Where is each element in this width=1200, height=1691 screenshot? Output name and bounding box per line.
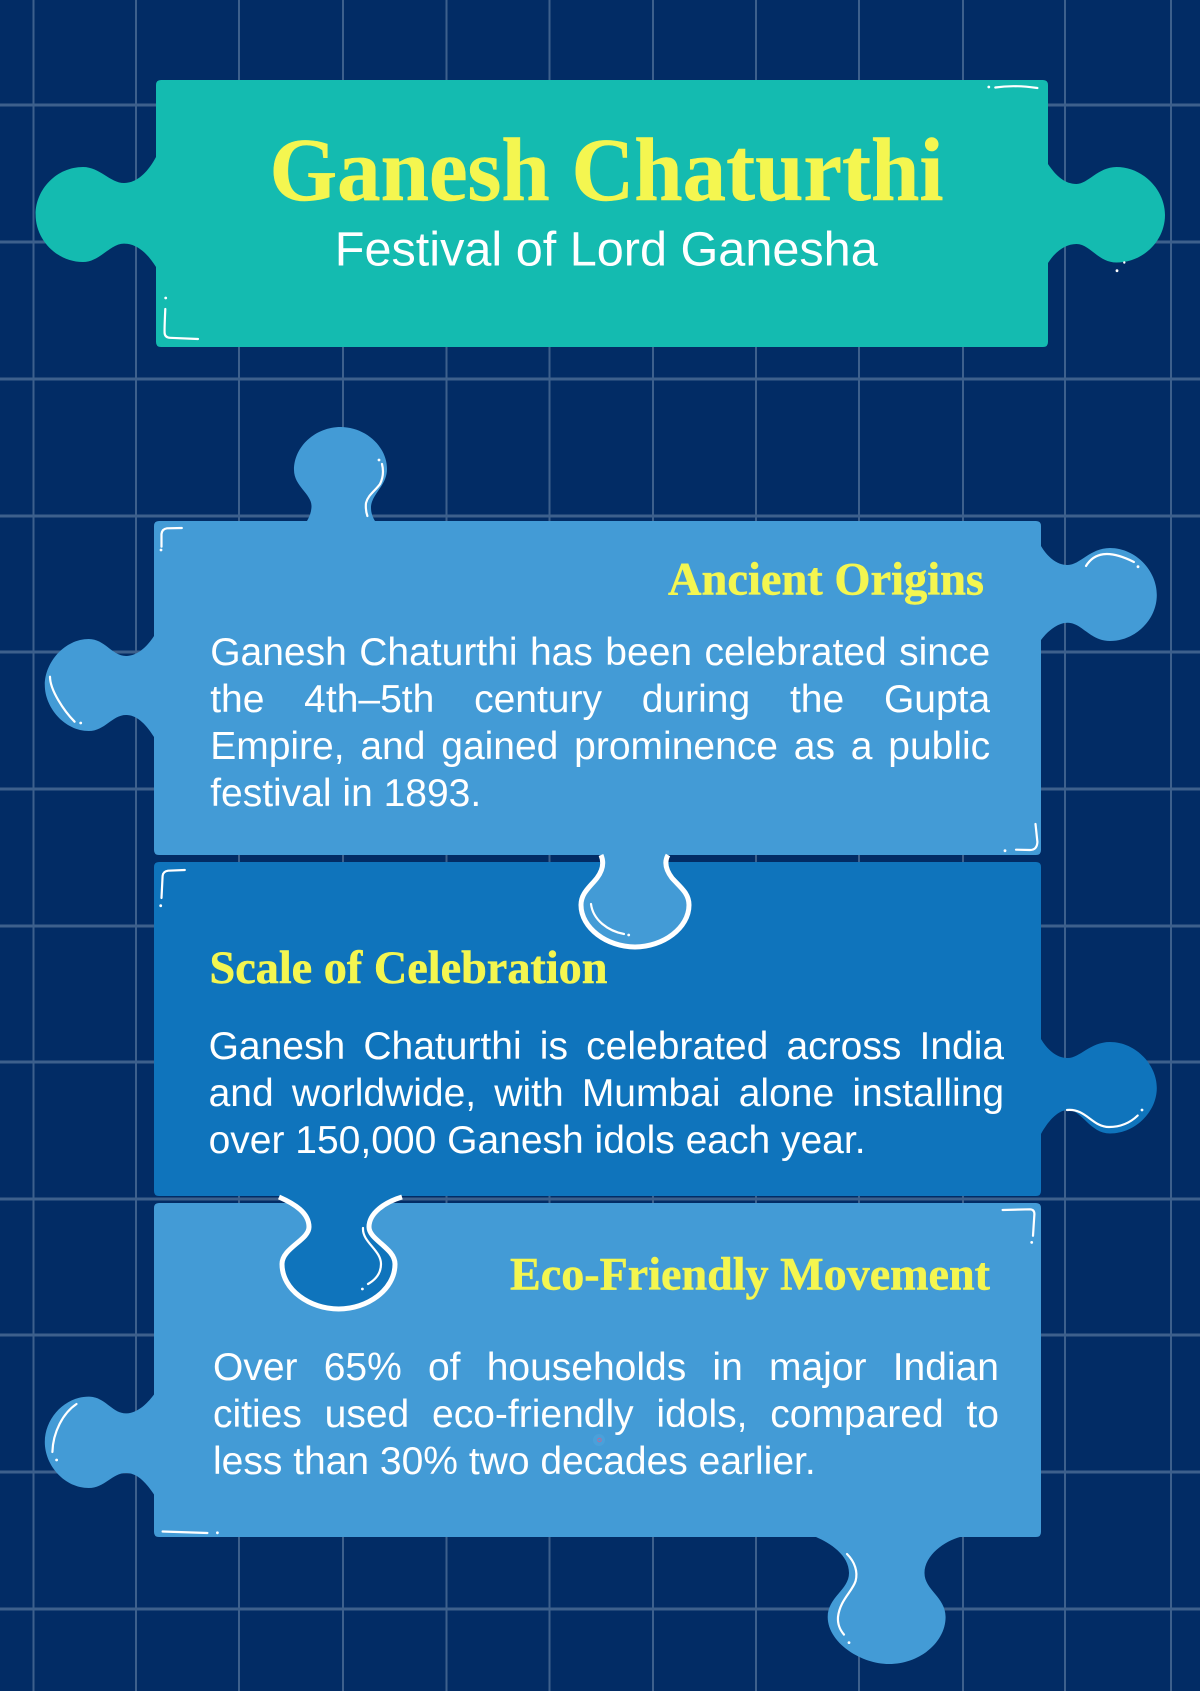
- outline: tab white edge: [581, 855, 689, 947]
- accent: ancient right tab: [1086, 554, 1139, 568]
- text block: ancient origins body: Ganesh Chaturthi has been celebrated since: [210, 630, 990, 674]
- panel: title puzzle piece: [36, 80, 1165, 347]
- accent: scale top left corner: [159, 870, 185, 907]
- marker: small pink ring: [593, 1434, 605, 1446]
- text block: scale body: over 150,000 Ganesh idols each year.: [209, 1118, 866, 1162]
- panel: scale of celebration: [154, 862, 1157, 1309]
- accent: ancient top left corner: [160, 528, 182, 551]
- text block: ancient origins body: Empire, and gained prominence as a public: [210, 724, 990, 768]
- title: Ganesh Chaturthi: [270, 121, 944, 220]
- accent: ancient top tab: [366, 459, 383, 516]
- corner accent: title top right: [987, 86, 1037, 88]
- text block: ancient origins body: the 4th–5th century during the Gupta: [210, 678, 990, 720]
- text block: scale body: Ganesh Chaturthi is celebrated across India: [209, 1024, 1004, 1068]
- accent dots: title right tab: [1116, 261, 1126, 272]
- text block: scale body: and worldwide, with Mumbai alone installing: [209, 1072, 1004, 1114]
- subtitle: Festival of Lord Ganesha: [335, 222, 879, 276]
- outline: tab white edge: [279, 1197, 402, 1309]
- accent: eco top right corner: [1003, 1209, 1034, 1244]
- text block: eco-friendly body: Over 65% of households in major Indian: [213, 1346, 999, 1389]
- panel: ancient origins: [45, 427, 1157, 947]
- accent: eco bottom left corner: [163, 1531, 219, 1534]
- heading: ancient origins: Ancient Origins: [668, 553, 984, 605]
- accent: scale right tab: [1067, 1109, 1143, 1127]
- text block: scale body: [209, 1022, 1004, 1172]
- accent: eco left tab: [52, 1404, 76, 1461]
- accent: ancient bottom tab: [591, 904, 630, 936]
- accent: ancient left tab: [50, 677, 82, 724]
- text block: eco-friendly body: cities used eco-friendly idols, compared to: [213, 1393, 999, 1436]
- heading: scale of celebration: Scale of Celebration: [210, 942, 608, 994]
- corner accent: title bottom left: [164, 297, 198, 339]
- accent: scale bottom tab: [361, 1228, 381, 1290]
- panel: eco-friendly movement: [45, 1203, 1041, 1664]
- accent: ancient bottom right corner: [1004, 824, 1037, 852]
- text block: eco-friendly body: [213, 1344, 999, 1494]
- text block: eco-friendly body: less than 30% two decades earlier.: [213, 1440, 816, 1483]
- heading: eco-friendly movement: Eco-Friendly Movement: [510, 1248, 990, 1300]
- text block: ancient origins body: [210, 628, 990, 828]
- accent: eco bottom tab: [838, 1554, 856, 1644]
- text block: ancient origins body: festival in 1893.: [210, 772, 481, 814]
